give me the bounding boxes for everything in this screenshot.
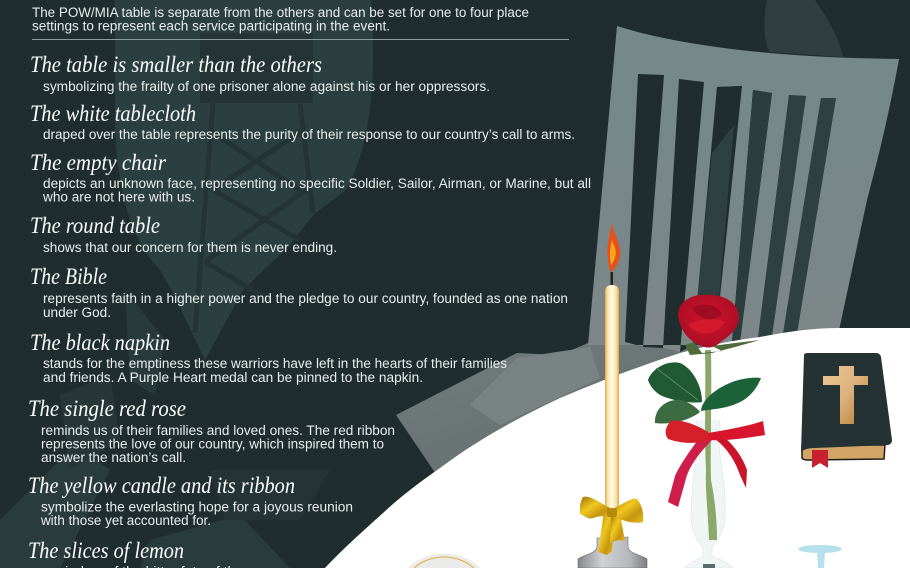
chair back <box>588 26 899 352</box>
icon: candle <box>578 223 647 568</box>
item: single red rose: answer the nation’s call. <box>41 450 186 465</box>
item: black napkin: The black napkin <box>30 330 170 355</box>
item: single red rose: The single red rose <box>28 396 186 421</box>
item: white tablecloth: The white tablecloth <box>30 101 196 126</box>
item: single red rose <box>28 396 395 465</box>
item: empty chair: The empty chair <box>30 150 167 175</box>
item: single red rose: represents the love of our country, which inspired them to <box>41 436 384 452</box>
rose leaves <box>648 362 761 423</box>
item: yellow candle and ribbon: with those yet accounted for. <box>40 513 211 528</box>
icon: blue glass <box>798 545 842 568</box>
icon: Bible <box>801 353 892 468</box>
item: small table: The table is smaller than the others <box>30 52 322 77</box>
red ribbon <box>666 421 765 507</box>
Bible cover <box>801 353 892 452</box>
icon: rose in bud vase <box>648 295 765 568</box>
rose stem <box>705 350 717 540</box>
item: empty chair <box>30 150 591 204</box>
item: single red rose: reminds us of their families and loved ones. The red ribbon <box>41 423 395 438</box>
candle body <box>605 285 619 530</box>
item: black napkin: and friends. A Purple Heart medal can be pinned to the napkin. <box>43 370 423 385</box>
item: round table <box>30 213 337 255</box>
bookmark <box>812 450 828 468</box>
glass vase <box>685 421 733 568</box>
intro text <box>32 5 529 34</box>
candle wick <box>610 272 613 285</box>
item: small table <box>30 52 490 94</box>
icon: bread plate <box>408 554 480 568</box>
item: white tablecloth <box>30 101 575 142</box>
item: empty chair: depicts an unknown face, representing no specific Soldier, Sailor, Airman, or Marine, but all <box>43 176 591 191</box>
candle flame <box>607 223 620 272</box>
item: yellow candle and ribbon <box>28 473 353 528</box>
item: white tablecloth: draped over the table represents the purity of their response to our country’s call to arms. <box>43 127 575 142</box>
rose bloom <box>678 295 760 355</box>
item: slices of lemon <box>28 538 258 568</box>
item: slices of lemon: The slices of lemon <box>28 538 184 563</box>
gold ribbon <box>580 497 643 555</box>
item: Bible <box>30 264 568 320</box>
Bible pages <box>802 445 885 460</box>
candle holder <box>578 537 647 568</box>
item: small table: symbolizing the frailty of one prisoner alone against his or her oppressors. <box>43 79 490 94</box>
intro text: The POW/MIA table is separate from the others and can be set for one to four place <box>32 5 529 20</box>
item: Bible: under God. <box>43 305 111 320</box>
item: Bible: represents faith in a higher power and the pledge to our country, founded as one nation <box>43 291 568 306</box>
item: black napkin: stands for the emptiness these warriors have left in the hearts of their families <box>43 356 507 371</box>
chair silhouette <box>396 26 899 480</box>
item: Bible: The Bible <box>30 264 107 289</box>
item: yellow candle and ribbon: The yellow candle and its ribbon <box>28 473 295 498</box>
item: round table: The round table <box>30 213 160 238</box>
chair seat <box>396 330 840 480</box>
item: yellow candle and ribbon: symbolize the everlasting hope for a joyous reunion <box>41 500 353 514</box>
item: round table: shows that our concern for them is never ending. <box>43 240 337 255</box>
white round table <box>325 328 910 568</box>
gold cross <box>823 366 868 424</box>
item: empty chair: who are not here with us. <box>42 190 195 204</box>
item: black napkin <box>30 330 507 385</box>
intro text: settings to represent each service participating in the event. <box>32 18 390 34</box>
